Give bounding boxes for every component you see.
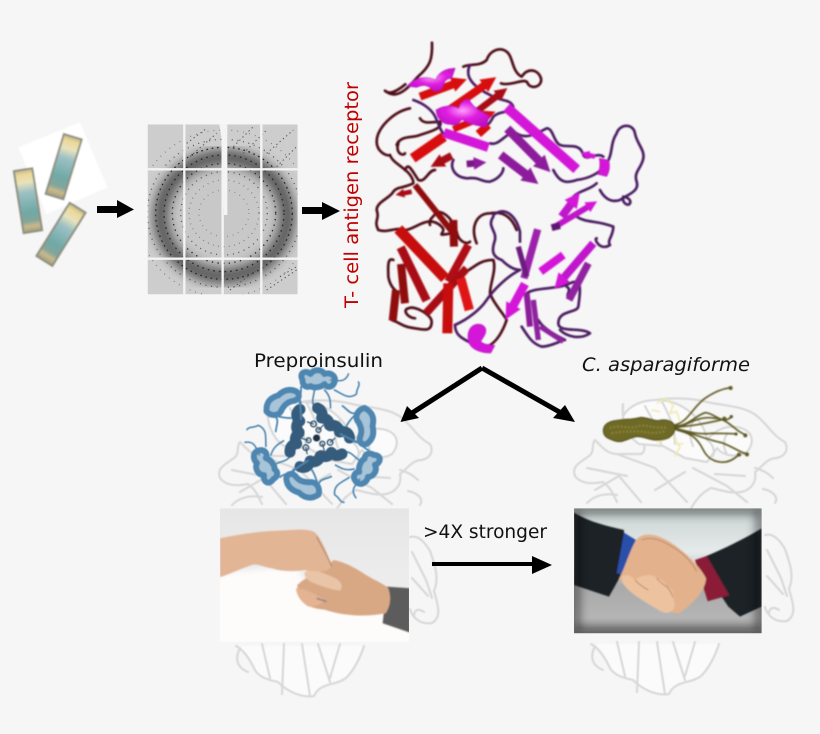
arrow: diffraction to structure [302, 202, 340, 220]
T-cell receptor ribbon structure [376, 43, 644, 353]
flagella [675, 388, 748, 462]
label: >4X stronger: >4X stronger [423, 521, 547, 543]
flagella tips [722, 386, 749, 457]
label: T-cell antigen receptor: T- cell antigen receptor [342, 82, 363, 309]
bacterium [603, 386, 749, 462]
preproinsulin structure [229, 370, 383, 521]
yellow ligand [652, 398, 683, 457]
label: C. asparagiforme: C. asparagiforme [582, 354, 750, 376]
photo: weak handshake [220, 508, 409, 633]
helices [407, 68, 609, 353]
diffraction pattern [148, 124, 298, 294]
crystals [13, 122, 107, 267]
arrow: weak to strong [432, 556, 552, 574]
photo: strong handshake [574, 508, 762, 633]
ghost protein behind preproinsulin [219, 400, 438, 696]
lower right strands [513, 203, 593, 342]
purple chain loops [413, 65, 644, 347]
top domain strands red [413, 84, 595, 175]
red chain loops [376, 43, 541, 347]
top domain strands magenta [444, 133, 488, 147]
label: Preproinsulin: Preproinsulin [254, 350, 383, 372]
branching arrows [400, 368, 575, 422]
lower left strands [393, 185, 469, 333]
ghost protein behind C. asparagiforme [574, 398, 793, 694]
arrow: crystals to diffraction [97, 200, 134, 218]
vignette [574, 508, 762, 633]
